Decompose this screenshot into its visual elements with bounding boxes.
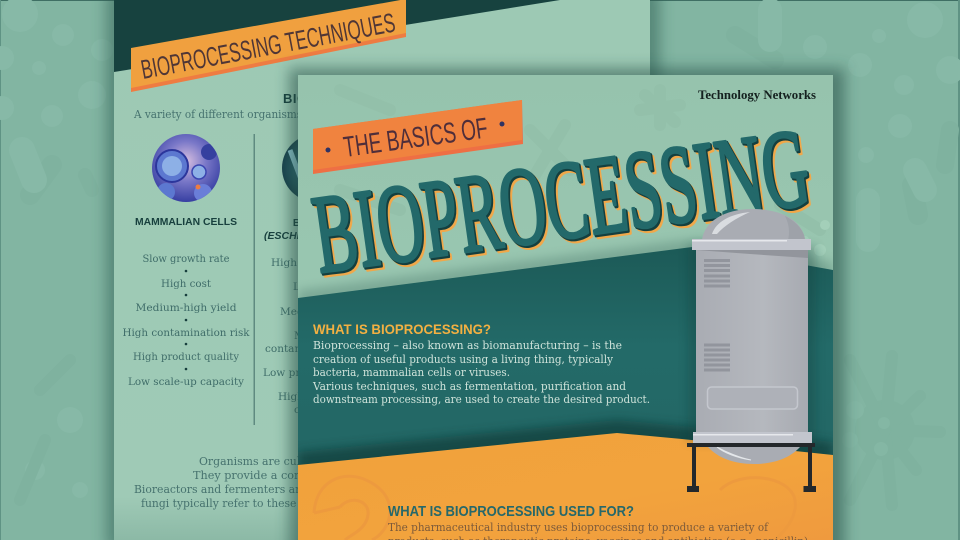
trait list: High cost — [161, 278, 212, 290]
body text: bacteria, mammalian cells or viruses. — [313, 366, 510, 379]
column: mammalian cells — [122, 134, 250, 388]
column: bacteria — [264, 139, 298, 413]
trait list: Medium-high yield — [136, 302, 237, 314]
trait list — [263, 257, 370, 416]
bottom flange — [693, 432, 812, 443]
logo: Technology Networks — [698, 87, 816, 102]
shadow above orange — [298, 417, 833, 465]
top dome — [702, 209, 805, 240]
closing text: They provide a controlled environment. — [193, 469, 418, 482]
trait list: High scale-up — [278, 391, 352, 403]
shadow above teal band — [298, 236, 833, 298]
title: bioprocessing — [310, 131, 812, 278]
heading: WHAT IS BIOPROCESSING? — [313, 321, 491, 337]
panel: what is bioprocessing used for — [298, 433, 833, 540]
panel: the basics of bioprocessing page — [298, 75, 833, 540]
body text: The pharmaceutical industry uses bioprocessing to produce a variety of — [388, 521, 769, 534]
trait list: High contamination risk — [122, 327, 250, 339]
tank body — [696, 250, 808, 433]
body text: Bioprocessing – also known as biomanufacturing – is the — [313, 339, 622, 352]
faint background microbes — [340, 90, 820, 230]
intro heading: BIOPROCESSING — [283, 91, 399, 106]
banner: the basics of — [313, 100, 523, 174]
column: bacteria: (ESCHERICHIA COLI) — [264, 230, 371, 242]
shadow of front page — [289, 68, 845, 540]
body text — [388, 521, 808, 540]
bottom dome — [708, 447, 800, 464]
top flange — [692, 239, 811, 250]
trait list: capacity — [294, 404, 339, 416]
icon: bacteria image — [282, 139, 298, 197]
trait list: Slow growth rate — [142, 253, 230, 265]
dark header band — [114, 0, 560, 72]
trait list: Low product quality — [263, 367, 370, 379]
closing text: Organisms are cultured in bioreactors. — [199, 455, 414, 468]
trait list: High product quality — [133, 351, 239, 363]
trait list: Medium — [294, 330, 338, 342]
body text — [312, 339, 650, 406]
icon: mammalian cell image — [152, 134, 220, 202]
icon: question mark outlines — [314, 476, 795, 540]
body text: downstream processing, are used to create the desired product. — [313, 393, 650, 406]
trait list: Low cost — [293, 281, 341, 293]
trait list: Medium yield — [280, 306, 353, 318]
heading: WHAT IS BIOPROCESSING USED FOR? — [388, 503, 634, 520]
shadow of back page — [106, 0, 660, 540]
column heading: BACTERIA — [293, 217, 348, 229]
access plate — [708, 387, 798, 409]
intro text: A variety of different organisms can be used in bioprocessing — [133, 108, 459, 121]
banner: bioprocessing techniques — [131, 0, 406, 92]
vents — [704, 259, 730, 372]
column heading: MAMMALIAN CELLS — [135, 216, 237, 228]
trait list: contamination risk — [265, 343, 366, 355]
trait list — [122, 253, 250, 388]
body text: creation of useful products using a living thing, typically — [313, 353, 614, 366]
stand — [687, 443, 816, 492]
panel: bioprocessing techniques page — [114, 0, 650, 540]
trait list: High growth rate — [271, 257, 363, 269]
closing text: Bioreactors and fermenters are similar, but those for — [134, 483, 425, 496]
trait list: Low scale-up capacity — [128, 376, 244, 388]
closing text: fungi typically refer to these systems as fermenters. — [141, 497, 426, 510]
panel: what is bioprocessing — [298, 246, 833, 480]
icon: bioreactor tank — [687, 209, 816, 492]
banner: the basics of: THE BASICS OF — [342, 113, 490, 164]
closing text — [134, 455, 426, 510]
body text: Various techniques, such as fermentation, purification and — [312, 380, 626, 393]
tank shadow — [688, 246, 816, 442]
